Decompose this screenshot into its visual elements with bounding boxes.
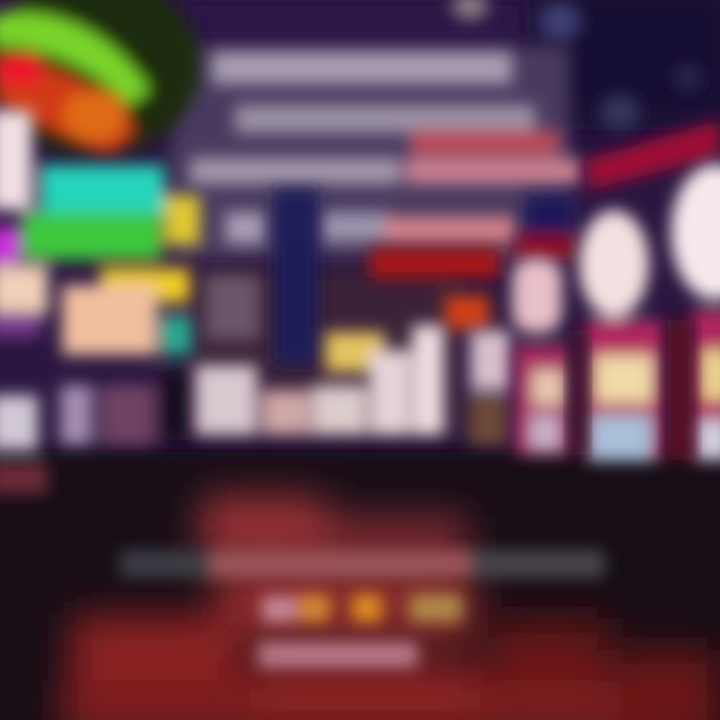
panel: right figures	[512, 164, 720, 461]
chart: central light bars	[195, 275, 510, 445]
callout: highlighted footer values, text illegible in reference	[258, 594, 462, 668]
heading: title lines, text illegible in reference	[190, 52, 580, 244]
panel: red floor	[60, 495, 720, 720]
icon: figure 2	[579, 210, 663, 461]
icon: figure 1	[512, 258, 570, 455]
icon: decorative hat, upper left	[0, 0, 200, 155]
panel: left colour column	[0, 110, 200, 494]
icon: stars, upper right	[452, 0, 702, 130]
panel: central dark column and red accent	[274, 120, 720, 365]
icon: figure 3	[671, 164, 720, 460]
text block: footer line, text illegible in reference	[120, 550, 605, 578]
